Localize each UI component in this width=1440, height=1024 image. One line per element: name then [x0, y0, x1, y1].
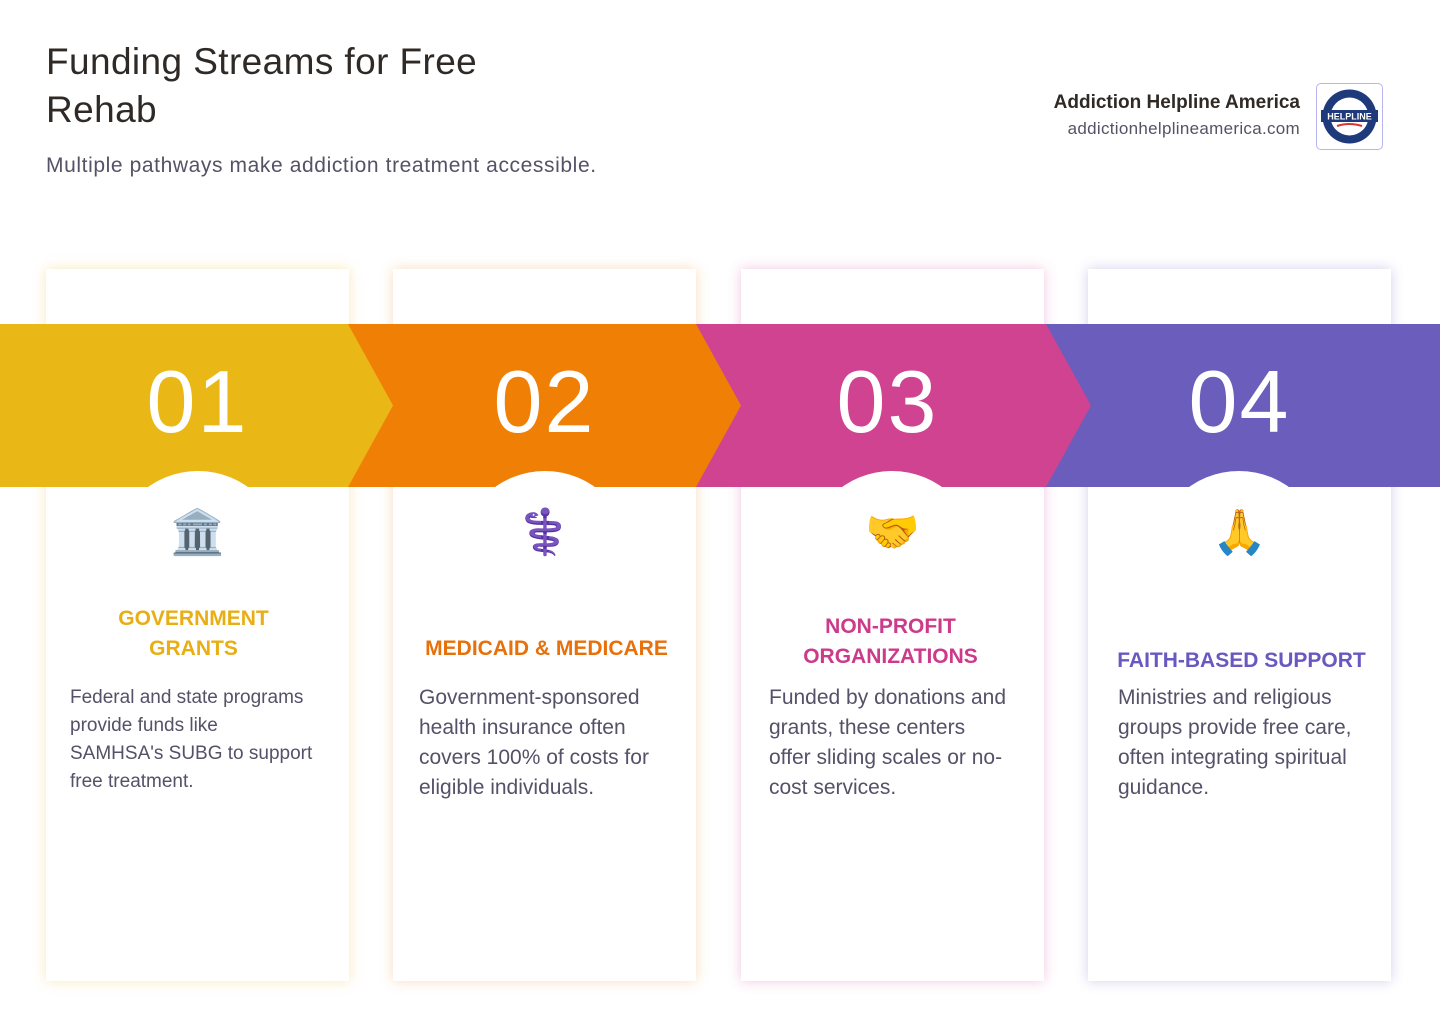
- brand name: Addiction Helpline America: [1054, 92, 1300, 113]
- title: Rehab: [46, 89, 157, 130]
- body 4: guidance.: [1118, 776, 1209, 799]
- body 4: [1118, 686, 1351, 799]
- circle 2: [459, 471, 631, 643]
- icon: medical: ⚕️: [517, 508, 572, 557]
- body 2: [419, 686, 649, 799]
- heading 3: NON-PROFIT: [825, 615, 956, 638]
- body 3: cost services.: [769, 776, 896, 799]
- body 3: grants, these centers: [769, 716, 965, 739]
- heading 1: [118, 607, 269, 660]
- body 2: Government-sponsored: [419, 686, 640, 709]
- body 1: [70, 687, 312, 792]
- body 3: offer sliding scales or no-: [769, 746, 1002, 769]
- heading 2: MEDICAID & MEDICARE: [425, 637, 668, 660]
- body 1: provide funds like: [70, 715, 218, 736]
- body 3: Funded by donations and: [769, 686, 1006, 709]
- body 2: health insurance often: [419, 716, 626, 739]
- brand url: addictionhelplineamerica.com: [1068, 119, 1300, 138]
- logo: [1316, 83, 1383, 150]
- circle 3: [806, 471, 978, 643]
- title: Funding Streams for Free: [46, 41, 477, 82]
- brand block: [1054, 83, 1383, 150]
- body 1: Federal and state programs: [70, 687, 303, 708]
- body 4: groups provide free care,: [1118, 716, 1351, 739]
- circle 1: [112, 471, 284, 643]
- logo: HELPLINE: [1327, 112, 1372, 122]
- card 1: [46, 269, 349, 981]
- body 1: free treatment.: [70, 771, 194, 792]
- icon: handshake: 🤝: [865, 508, 920, 557]
- arrow 3: [696, 324, 1091, 487]
- body 1: SAMHSA's SUBG to support: [70, 743, 312, 764]
- body 2: eligible individuals.: [419, 776, 594, 799]
- heading 1: GOVERNMENT: [118, 607, 269, 630]
- body 2: covers 100% of costs for: [419, 746, 649, 769]
- arrow 4: [1046, 324, 1440, 487]
- arrow 2: [348, 324, 741, 487]
- arrow 1: [0, 324, 393, 487]
- number 02: 02: [494, 352, 595, 451]
- body 3: [769, 686, 1006, 799]
- number 03: 03: [837, 352, 938, 451]
- number 04: 04: [1189, 352, 1290, 451]
- body 4: Ministries and religious: [1118, 686, 1332, 709]
- heading 1: GRANTS: [149, 637, 238, 660]
- circle 4: [1153, 471, 1325, 643]
- arrow band: [0, 324, 1440, 487]
- card 3: [741, 269, 1044, 981]
- heading 4: FAITH-BASED SUPPORT: [1117, 649, 1366, 672]
- icon: praying hands: 🙏: [1212, 508, 1267, 557]
- heading 3: [803, 615, 978, 668]
- card 4: [1088, 269, 1391, 981]
- heading 3: ORGANIZATIONS: [803, 645, 978, 668]
- icon: bank: 🏛️: [170, 508, 225, 557]
- subtitle: Multiple pathways make addiction treatment accessible.: [46, 154, 597, 177]
- body 4: often integrating spiritual: [1118, 746, 1347, 769]
- title: [46, 41, 477, 130]
- card 2: [393, 269, 696, 981]
- number 01: 01: [147, 352, 248, 451]
